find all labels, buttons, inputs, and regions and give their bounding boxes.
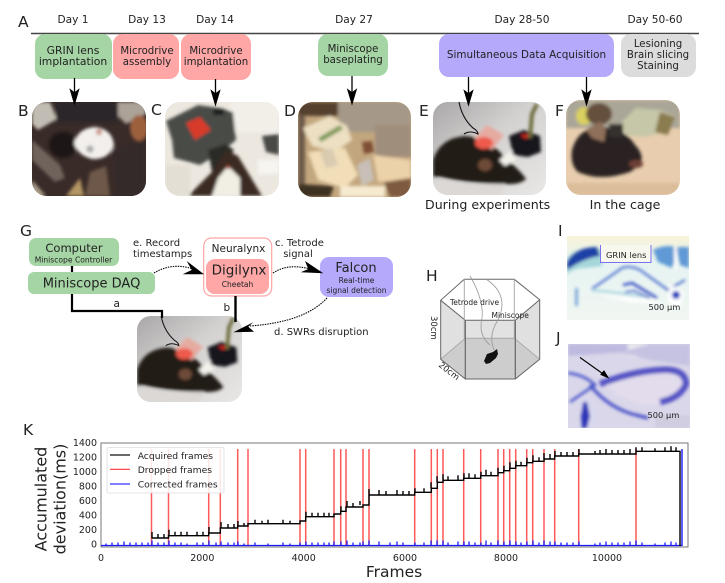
- box: Microdrive implantation: Microdrive: [189, 46, 243, 57]
- day labels: Day 1: [57, 14, 89, 26]
- scale: 500 um: 500 μm: [648, 410, 679, 420]
- box: Neuralynx with Digilynx: Cheetah: [222, 280, 253, 289]
- label: GRIN lens: GRIN lens: [606, 250, 646, 260]
- label c: c. Tetrode: [275, 238, 324, 249]
- arrow: to photo F: [582, 77, 590, 104]
- box: GRIN lens implantation: GRIN lens: [47, 44, 100, 57]
- y axis ticks: 200: [79, 525, 97, 536]
- label c: [275, 238, 324, 260]
- arrow: to photo C: [212, 79, 220, 104]
- panel E: photo during experiments: E: [419, 102, 429, 120]
- label b: b: [224, 302, 230, 314]
- mouse silhouette: [484, 349, 498, 364]
- x axis ticks: [98, 553, 622, 564]
- panel F: photo in the cage: F: [555, 102, 564, 120]
- box: Neuralynx with Digilynx: Neuralynx: [212, 243, 265, 255]
- box: Computer: Miniscope Controller: [35, 256, 113, 264]
- box: Falcon: Falcon: [335, 261, 377, 276]
- dotted arrow c: [273, 261, 323, 273]
- box: Miniscope baseplating: Miniscope: [328, 44, 378, 55]
- panel E: photo during experiments: [419, 102, 550, 212]
- arrow: to photo B: [70, 78, 78, 104]
- box: GRIN lens implantation: implantation: [39, 55, 107, 68]
- box: Lesioning, brain slicing, staining: [621, 34, 696, 77]
- y axis ticks: 1400: [73, 438, 97, 449]
- box: Microdrive implantation: [181, 34, 251, 80]
- dropped frames series: [152, 449, 636, 545]
- dimension: 20cm: 20cm: [436, 360, 461, 383]
- box: Neuralynx with Digilynx: [204, 238, 272, 296]
- box: Computer: Computer: [45, 241, 103, 255]
- box: Computer: [29, 238, 119, 266]
- legend: Dropped frames: [138, 465, 212, 476]
- y axis ticks: 1000: [73, 467, 97, 478]
- x axis title: Frames: [366, 563, 422, 581]
- box: Lesioning, brain slicing, staining: Brain slicing: [627, 50, 689, 61]
- panel label A: A: [18, 13, 29, 31]
- panel K: accumulated deviation chart: [23, 421, 688, 581]
- dotted arrow e: [154, 261, 204, 274]
- label e: e. Record: [133, 238, 180, 249]
- label a: a: [114, 298, 120, 310]
- box: Miniscope DAQ: [28, 272, 155, 294]
- box: Falcon: signal detection: [326, 286, 387, 295]
- label e: timestamps: [133, 249, 192, 260]
- plot frame: [101, 443, 688, 547]
- box: Lesioning, brain slicing, staining: Staining: [637, 61, 679, 72]
- panel F: photo in the cage: [555, 100, 680, 212]
- y axis ticks: 800: [79, 482, 97, 492]
- x axis ticks: 6000: [393, 553, 417, 564]
- y axis ticks: 400: [79, 510, 97, 522]
- panel B: surgery photo: B: [18, 102, 29, 120]
- panel J: histology tetrode track: J: [555, 329, 561, 347]
- arrow: to photo E: [464, 77, 472, 104]
- box: GRIN lens implantation: [35, 34, 112, 79]
- box: Simultaneous Data Acquisition: Simultaneous Data Acquisition: [447, 49, 606, 61]
- panel D: baseplating photo: D: [284, 102, 296, 120]
- tetrode and miniscope wires: [470, 276, 502, 350]
- y axis title: deviation(ms): [50, 444, 70, 554]
- caption: In the cage: In the cage: [590, 197, 661, 212]
- box: Miniscope DAQ: Miniscope DAQ: [43, 276, 140, 292]
- legend: Corrected frames: [138, 480, 218, 490]
- box: Neuralynx with Digilynx: Digilynx: [212, 262, 266, 278]
- day labels: Day 27: [335, 14, 373, 26]
- day labels: [57, 14, 683, 26]
- label d: d. SWRs disruption: [274, 327, 369, 338]
- box: Falcon: Real-time: [339, 276, 375, 285]
- day labels: Day 13: [128, 14, 166, 26]
- panel C: microdrive implantation photo: C: [151, 101, 162, 119]
- label: Tetrode drive: Tetrode drive: [449, 298, 499, 307]
- box: Microdrive assembly: [113, 34, 179, 79]
- box: Microdrive assembly: assembly: [123, 57, 171, 68]
- day labels: Day 50-60: [627, 14, 683, 26]
- box: Microdrive implantation: implantation: [184, 57, 248, 68]
- panel I: histology GRIN lens: I: [558, 222, 563, 240]
- panel G: recording system diagram: [20, 222, 393, 402]
- acquired frames series: [152, 446, 680, 546]
- panel J: histology tetrode track: [555, 329, 690, 428]
- y axis ticks: 0: [91, 540, 97, 550]
- arrow: to photo D: [348, 76, 356, 104]
- GRIN lens marker: [600, 245, 651, 262]
- y axis ticks: [73, 438, 97, 550]
- panel I: histology GRIN lens: [558, 222, 689, 320]
- connector b: Digilynx to tetrode drive: [234, 296, 237, 322]
- panel K: accumulated deviation chart: K: [23, 421, 34, 439]
- panel A: timeline: [18, 13, 699, 80]
- x axis ticks: 0: [98, 553, 104, 564]
- legend: [107, 448, 224, 493]
- x axis ticks: 8000: [494, 553, 518, 564]
- corrected frames end spike: [681, 449, 683, 546]
- photo: mouse with implants: [137, 316, 242, 402]
- x axis ticks: 10000: [592, 553, 622, 564]
- day labels: Day 14: [196, 14, 234, 26]
- arrow to tetrode track: [580, 358, 608, 378]
- panel B: surgery photo: [18, 102, 148, 196]
- panel H: hexagonal arena: H: [426, 267, 438, 285]
- box: Microdrive assembly: Microdrive: [120, 46, 174, 57]
- corrected frames series: [101, 540, 682, 546]
- caption: During experiments: During experiments: [425, 197, 550, 212]
- connector: computer to DAQ: [71, 266, 73, 272]
- label: Miniscope: Miniscope: [492, 311, 529, 320]
- box: Miniscope baseplating: [318, 34, 388, 76]
- legend: Acquired frames: [138, 451, 213, 462]
- arena walls and floor: [441, 279, 540, 379]
- label c: signal: [283, 249, 313, 260]
- panel C: microdrive implantation photo: [151, 101, 279, 196]
- y axis title: [32, 444, 70, 554]
- panel H: hexagonal arena: [426, 267, 540, 383]
- box: Falcon: [320, 257, 393, 297]
- y axis ticks: 1200: [73, 452, 97, 464]
- connector a: DAQ to miniscope: [72, 294, 162, 318]
- x axis ticks: 2000: [190, 553, 214, 564]
- dotted arrow d: [233, 298, 327, 332]
- panel G: recording system diagram: G: [20, 222, 32, 240]
- box: Lesioning, brain slicing, staining: Lesioning: [634, 39, 682, 50]
- day labels: Day 28-50: [494, 14, 550, 26]
- y axis ticks: 600: [79, 496, 97, 507]
- dimension: 30cm: 30cm: [428, 316, 438, 340]
- x axis ticks: 4000: [292, 553, 316, 564]
- panel D: baseplating photo: [284, 102, 411, 197]
- scale: 500 um: 500 μm: [648, 302, 680, 312]
- y axis title: Accumulated: [32, 447, 50, 551]
- box: Miniscope baseplating: baseplating: [323, 55, 383, 66]
- label e: [133, 238, 192, 260]
- box: Simultaneous Data Acquisition: [439, 34, 614, 77]
